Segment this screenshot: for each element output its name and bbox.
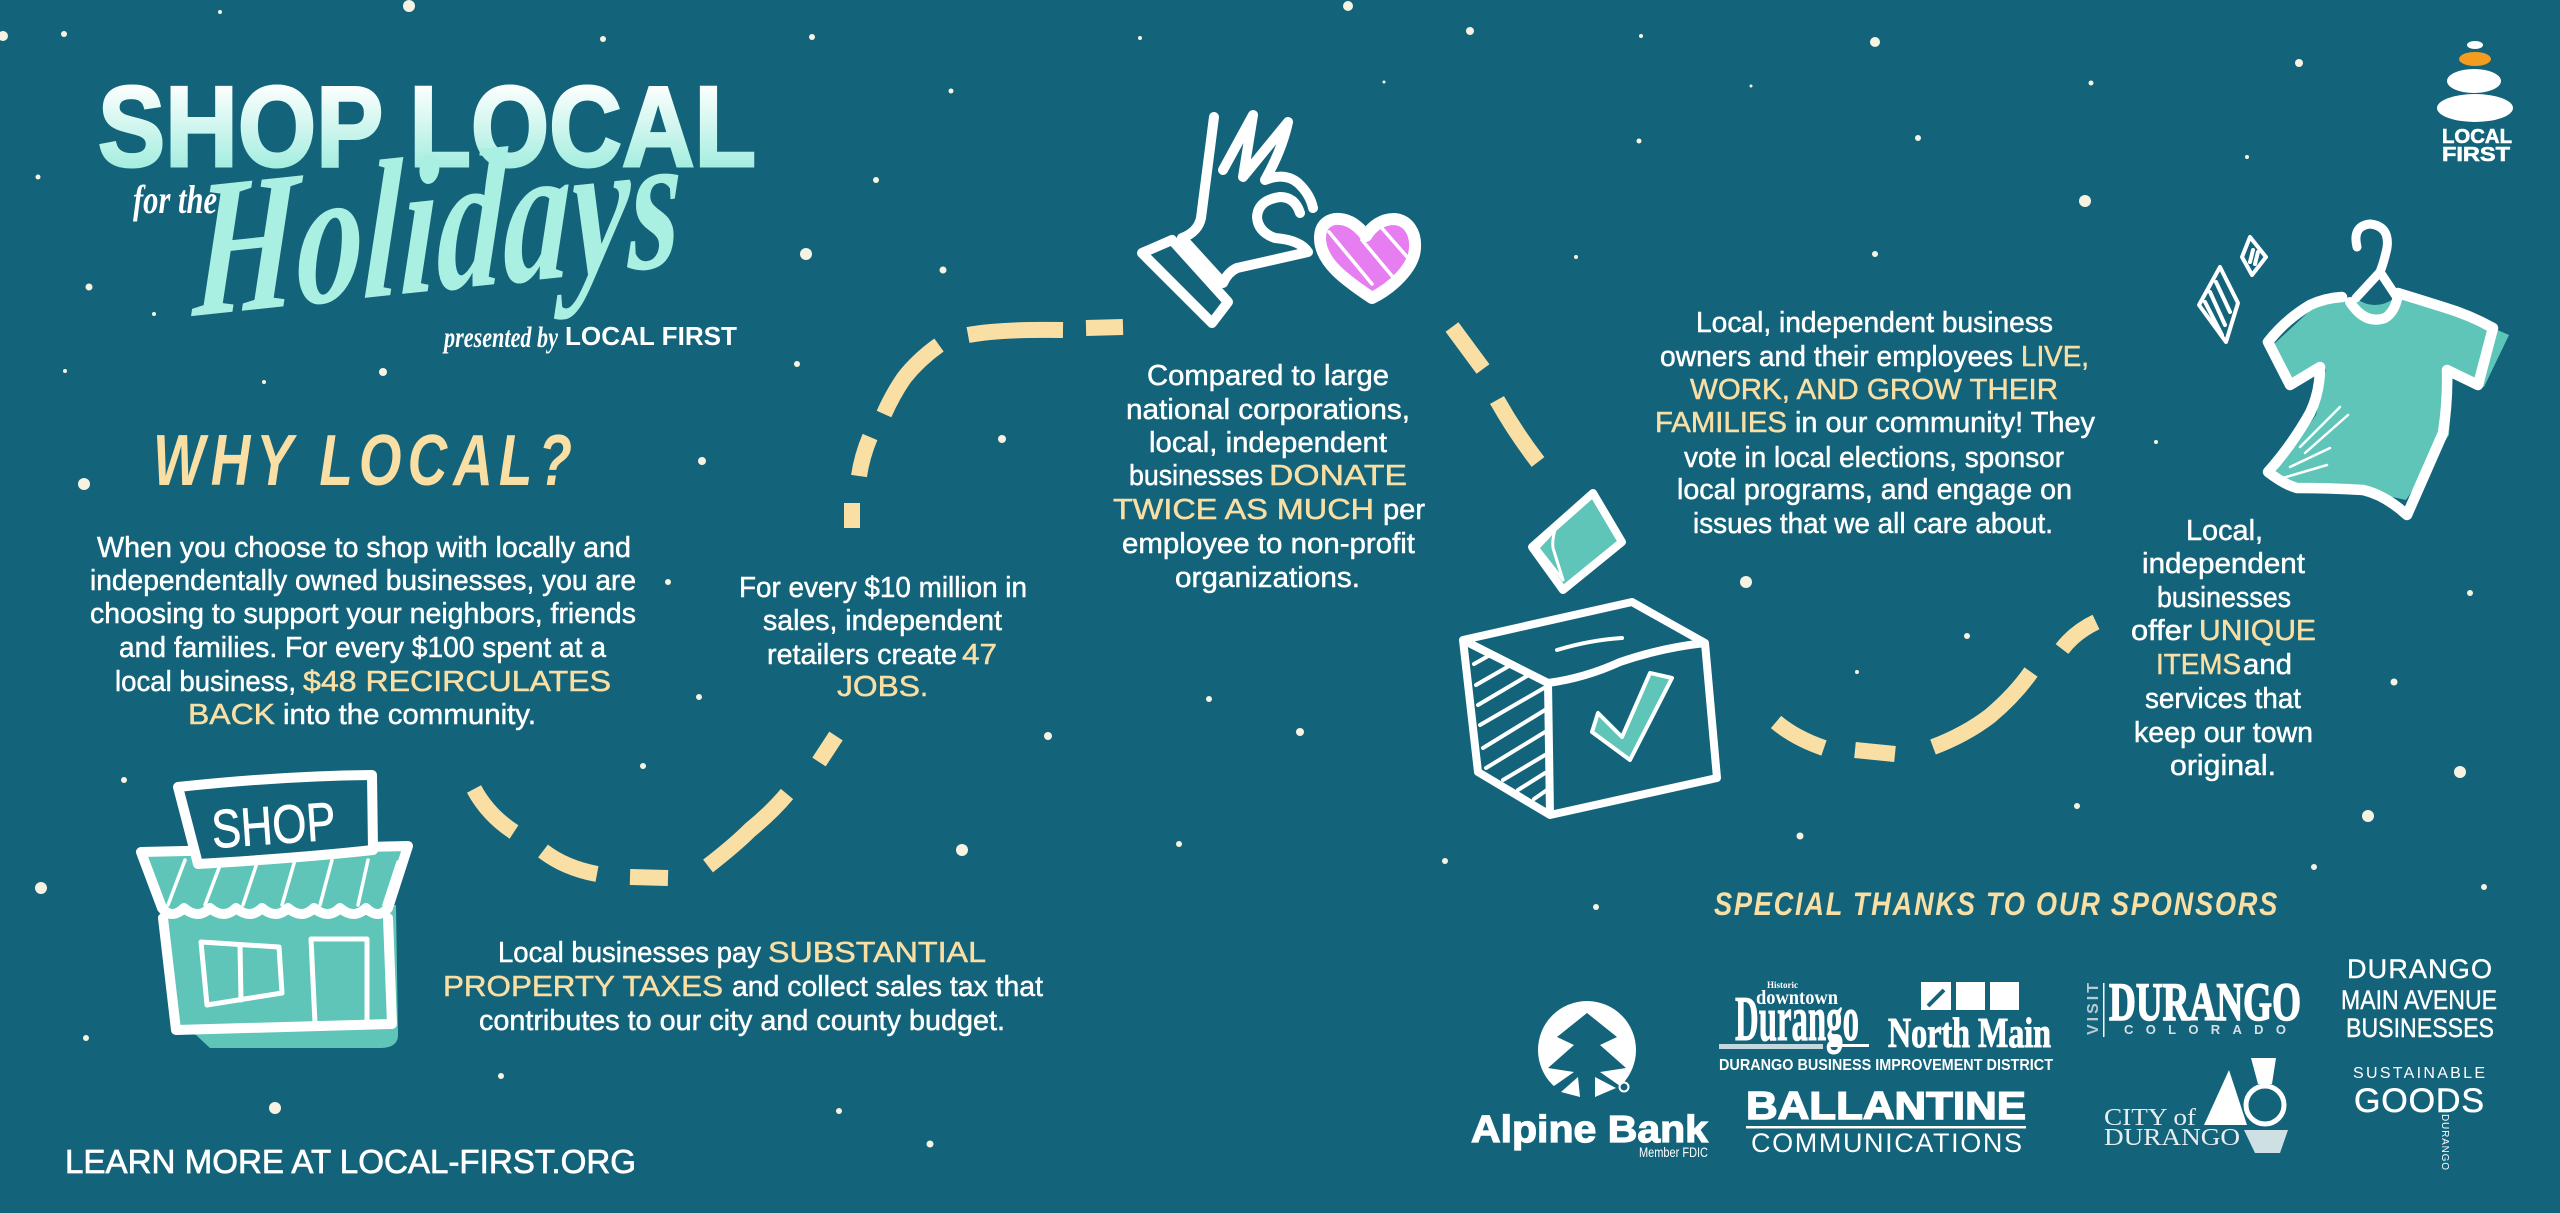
text block: property taxes: PROPERTY TAXES — [443, 971, 723, 1003]
text block: unique items — [2131, 515, 2316, 782]
neck hole — [2355, 276, 2395, 305]
heart — [1320, 219, 1415, 298]
shirt folds — [2283, 407, 2348, 478]
shop sign — [178, 775, 373, 864]
sponsor logo: ballantine communications — [1746, 1085, 2026, 1158]
shirt collar — [2350, 295, 2398, 320]
title — [98, 64, 756, 359]
text block: live work and grow — [1655, 307, 2095, 540]
sponsor logo: sustainable goods: GOODS — [2354, 1082, 2484, 1120]
sponsor logo: visit durango: COLORADO — [2124, 1022, 2286, 1037]
dashed path: left section — [474, 327, 1123, 878]
text block: unique items: original. — [2170, 750, 2276, 782]
text block: why local: independentally owned businesses, you are — [90, 565, 636, 597]
shop window — [201, 942, 282, 1005]
text block: unique items: offer — [2131, 615, 2192, 647]
text block: jobs: . — [920, 671, 928, 703]
text block: jobs: 47 — [962, 639, 997, 671]
sponsor logo: durango main avenue businesses: BUSINESSES — [2346, 1013, 2494, 1043]
sponsor logo: durango main avenue businesses: DURANGO — [2347, 954, 2492, 984]
text block: donate twice as much — [1113, 360, 1425, 594]
box hatching — [1474, 655, 1547, 799]
ballot box outline — [1463, 602, 1717, 815]
icon: t-shirt on hanger — [2199, 224, 2509, 515]
sponsor logo: visit durango: DURANGO — [2109, 972, 2301, 1032]
text block: unique items: services that — [2145, 683, 2301, 715]
text block: why local: When you choose to shop with locally and — [97, 532, 631, 564]
heart stripes — [1329, 226, 1408, 284]
text block: why local: into the community. — [283, 699, 536, 731]
text block: live work and grow: FAMILIES — [1655, 407, 1787, 439]
ballot check mark — [1592, 673, 1672, 760]
sparkle: small diamond — [2242, 237, 2266, 275]
sponsor logo: sustainable goods: DURANGO — [2439, 1114, 2450, 1170]
text block: donate twice as much: Compared to large — [1147, 360, 1389, 392]
sponsor logo: alpine bank: Member FDIC — [1639, 1144, 1708, 1160]
sponsor logo: city of durango: CITY of — [2104, 1105, 2196, 1131]
text block: property taxes: SUBSTANTIAL — [768, 937, 986, 969]
text block: why local: and families. For every $100 spent at a — [119, 632, 607, 664]
sponsor logo: durango main avenue businesses — [2341, 954, 2497, 1043]
sponsor logo: visit durango — [2085, 972, 2301, 1037]
ballot slot — [1557, 638, 1622, 650]
text block: why local: choosing to support your neighbors, friends — [90, 598, 636, 630]
sponsor logo: city of durango: DURANGO — [2104, 1125, 2240, 1151]
sponsor logo: durango business improvement district: DURANGO BUSINESS IMPROVEMENT DISTRICT — [1719, 1057, 2053, 1074]
sponsor logo: durango main avenue businesses: MAIN AVENUE — [2341, 985, 2497, 1015]
shirt outline — [2268, 293, 2493, 515]
text block: why local: $48 RECIRCULATES — [303, 666, 611, 698]
text block: live work and grow: in our community! They — [1795, 407, 2095, 439]
text block: donate twice as much: DONATE — [1269, 460, 1407, 492]
sponsor logo: city of durango — [2104, 1058, 2288, 1153]
sponsor logo: downtown durango: Durango — [1735, 983, 1859, 1054]
logo: local first stones: LOCAL — [2442, 126, 2512, 148]
icon: ballot box — [1463, 493, 1717, 815]
text block: live work and grow: WORK, AND GROW THEIR — [1690, 374, 2058, 406]
presented by: presented by — [442, 321, 558, 354]
sparkle: large diamond — [2199, 267, 2238, 342]
text block: live work and grow: owners and their employees — [1660, 341, 2013, 373]
text block: jobs — [739, 572, 1027, 703]
text block: why local: BACK — [188, 699, 276, 731]
hanger — [2356, 224, 2396, 298]
footer link text: LEARN MORE AT LOCAL-FIRST.ORG — [65, 1143, 636, 1180]
text block: donate twice as much: organizations. — [1175, 562, 1360, 594]
text block: unique items: UNIQUE — [2199, 615, 2316, 647]
text block: unique items: keep our town — [2134, 717, 2313, 749]
heading: why local: WHY LOCAL? — [153, 421, 578, 501]
text block: live work and grow: local programs, and engage on — [1677, 474, 2072, 506]
dashed path: right section — [1452, 327, 2096, 754]
text block: property taxes: and collect sales tax that — [732, 971, 1043, 1003]
sponsor logo: ballantine communications: BALLANTINE — [1746, 1085, 2026, 1128]
icon: hand with heart — [1142, 115, 1415, 323]
sponsor logo: visit durango: VISIT — [2085, 983, 2102, 1035]
text block: jobs: For every $10 million in — [739, 572, 1027, 604]
text block: unique items: businesses — [2157, 582, 2291, 614]
shop door — [311, 939, 367, 1023]
text block: donate twice as much: per — [1383, 494, 1425, 526]
icon: shop — [141, 775, 408, 1048]
text block: live work and grow: vote in local elections, sponsor — [1684, 442, 2064, 474]
text block: unique items: independent — [2142, 548, 2305, 580]
sponsor logo: downtown durango: Historic — [1767, 980, 1798, 990]
logo: local first stones — [2437, 41, 2513, 166]
shop walls — [163, 918, 392, 1030]
sponsor logo: alpine bank: Alpine Bank — [1471, 1109, 1709, 1151]
shirt fill — [2274, 295, 2509, 500]
text block: jobs: JOBS — [837, 671, 920, 703]
text block: donate twice as much: TWICE AS MUCH — [1113, 494, 1374, 526]
text block: donate twice as much: local, independent — [1149, 427, 1387, 459]
heading: sponsors: SPECIAL THANKS TO OUR SPONSORS — [1714, 886, 2279, 922]
text block: live work and grow: LIVE, — [2021, 341, 2089, 373]
sponsor logo: downtown durango — [1719, 980, 1869, 1054]
text block: donate twice as much: businesses — [1129, 460, 1263, 492]
text block: donate twice as much: employee to non-profit — [1122, 528, 1415, 560]
sponsor logo: ballantine communications: COMMUNICATIONS — [1751, 1128, 2022, 1158]
text block: why local — [90, 532, 636, 731]
sponsor logo: north main: North Main — [1888, 1011, 2051, 1057]
text block: live work and grow: Local, independent business — [1696, 307, 2053, 339]
text block: jobs: retailers create — [767, 639, 957, 671]
text block: unique items: Local, — [2186, 515, 2263, 547]
for the: for the — [133, 177, 217, 222]
ballot paper — [1532, 493, 1622, 590]
text block: property taxes: contributes to our city and county budget. — [479, 1005, 1005, 1037]
text block: property taxes — [443, 937, 1043, 1037]
local first byline: LOCAL FIRST — [565, 321, 737, 351]
text block: live work and grow: issues that we all care about. — [1693, 508, 2053, 540]
shop awning — [144, 850, 404, 912]
title script: holidays: Holidays — [189, 88, 685, 359]
text block: donate twice as much: national corporations, — [1126, 394, 1410, 426]
sponsor logo: sustainable goods — [2353, 1065, 2485, 1170]
title line: shop local: SHOP LOCAL — [98, 64, 756, 191]
text block: why local: local business, — [115, 666, 296, 698]
sponsor logo: downtown durango: downtown — [1756, 987, 1838, 1009]
shop fill — [166, 905, 398, 1048]
text block: jobs: sales, independent — [763, 605, 1002, 637]
hand cuff — [1142, 240, 1228, 323]
text block: property taxes: Local businesses pay — [498, 937, 761, 969]
sponsor logo: alpine bank — [1471, 1001, 1709, 1160]
sponsor logo: north main — [1888, 982, 2051, 1057]
text block: unique items: ITEMS — [2156, 649, 2241, 681]
text block: unique items: and — [2243, 649, 2292, 681]
hand outline — [1182, 115, 1313, 283]
shop sign label: SHOP — [210, 791, 338, 860]
sponsor logo: sustainable goods: SUSTAINABLE — [2353, 1065, 2485, 1082]
logo: local first stones: FIRST — [2442, 144, 2510, 166]
